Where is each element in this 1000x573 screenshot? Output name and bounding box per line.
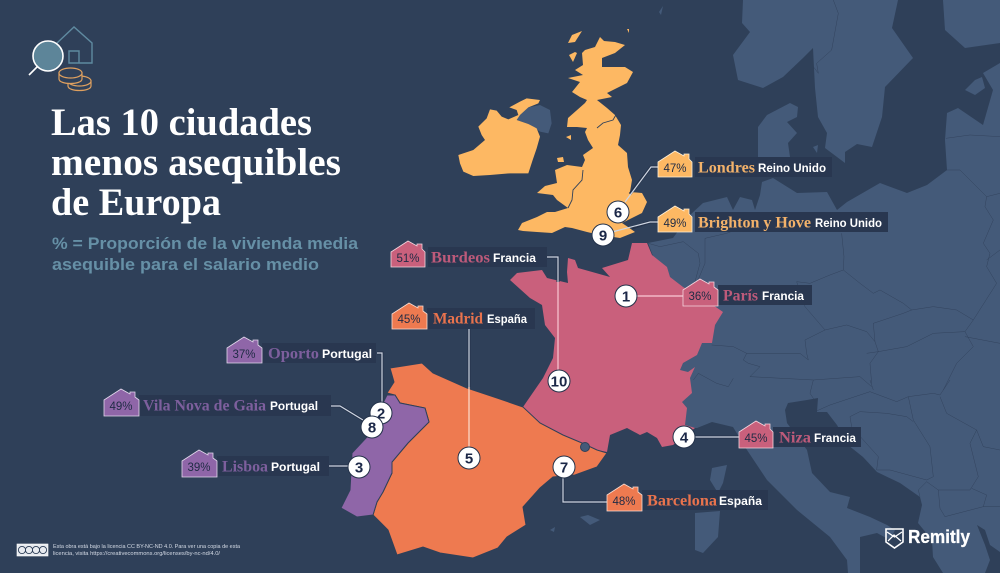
map: Northern Ireland [517, 105, 552, 133]
map: France [510, 243, 723, 452]
title: Las 10 ciudades [51, 101, 312, 144]
marker: 10: 10 [551, 374, 567, 390]
marker: 2: 2 [377, 406, 385, 422]
callout: Barcelona [563, 477, 768, 511]
map: Adriatic and Ionian seas [785, 398, 943, 573]
callout: Lisboa [182, 450, 352, 477]
callout: Oporto: Portugal [322, 349, 372, 361]
marker: 7 [553, 456, 575, 478]
marker: 5: 5 [465, 450, 473, 468]
map: Ireland [458, 98, 540, 176]
callout: Brighton y Hove: Brighton y Hove [698, 214, 811, 232]
marker: 9 [592, 224, 614, 246]
map: Andorra [580, 442, 590, 452]
callout: Lisboa: 39% [187, 462, 211, 474]
callout: París [626, 279, 812, 306]
map: northern borders [813, 0, 1000, 138]
callout: Niza: Niza [779, 430, 811, 446]
marker: 8 [361, 416, 383, 438]
callout: Niza: Francia [814, 433, 857, 445]
callout: Madrid: 45% [397, 314, 421, 326]
title: menos asequibles [51, 141, 341, 184]
marker: 10 [548, 370, 570, 392]
callout: Vila Nova de Gaia: Vila Nova de Gaia [143, 398, 266, 414]
callout: Brighton y Hove [612, 206, 888, 232]
callout: Vila Nova de Gaia: 49% [109, 401, 133, 413]
callout: Niza: 45% [744, 433, 768, 445]
callout: Vila Nova de Gaia [104, 389, 363, 420]
subtitle: asequible para el salario medio [52, 255, 319, 274]
license badge [17, 544, 48, 556]
callout: París: Francia [762, 291, 805, 303]
callout: Niza [695, 421, 861, 448]
map: southern Europe borders [693, 373, 1000, 517]
marker: 4 [673, 426, 695, 448]
map: surrounding Europe land [550, 0, 1000, 573]
callout: Oporto: Oporto [268, 346, 319, 362]
marker: 4: 4 [680, 430, 689, 446]
callout: Burdeos: Burdeos [431, 250, 490, 266]
marker: 3: 3 [355, 460, 363, 476]
callout: Vila Nova de Gaia: Portugal [270, 401, 318, 413]
callout: Londres: 47% [663, 163, 687, 175]
callout: Lisboa: Lisboa [222, 458, 268, 476]
logo: Remitly: Remitly [908, 527, 970, 547]
callout: Madrid: Madrid [433, 310, 483, 328]
logo: Remitly [886, 527, 970, 548]
callout: Londres [625, 151, 832, 202]
callout: Brighton y Hove: 49% [663, 218, 687, 230]
license text: licencia, visita https://creativecommons.org/licenses/by-nc-nd/4.0/ [53, 551, 220, 557]
icon: house, magnifier and coins [29, 27, 92, 90]
callout: París: 36% [688, 291, 712, 303]
callout: Barcelona: Barcelona [647, 492, 717, 510]
title: de Europa [51, 181, 221, 224]
marker: 9: 9 [599, 228, 607, 244]
license text: Esta obra está bajo la licencia CC BY-NC-ND 4.0. Para ver una copia de esta [53, 544, 241, 550]
subtitle: % = Proporción de la vivienda media [52, 234, 359, 253]
callout: Madrid: España [487, 314, 528, 326]
map: United Kingdom [518, 29, 647, 238]
marker: 2 [370, 402, 392, 424]
map: Portugal [341, 395, 429, 517]
callout: Londres: Reino Unido [758, 163, 826, 175]
callout: Londres: Londres [698, 160, 755, 176]
callout: Burdeos: 51% [396, 253, 420, 265]
map: central Europe borders [648, 170, 1000, 390]
marker: 3 [348, 456, 370, 478]
callout: Brighton y Hove: Reino Unido [815, 218, 882, 230]
marker: 1: 1 [622, 288, 630, 306]
callout: Barcelona: España [719, 496, 763, 508]
callout: París: París [723, 288, 758, 304]
marker: 5 [458, 447, 480, 469]
callout: Burdeos: Francia [493, 253, 537, 265]
marker: 8: 8 [368, 420, 376, 436]
marker: 7: 7 [560, 460, 568, 476]
callout: Oporto [227, 337, 382, 405]
marker: 1 [615, 285, 637, 307]
callout: Barcelona: 48% [612, 496, 636, 508]
callout: Madrid [392, 303, 535, 450]
map: Spain [373, 363, 607, 558]
marker: 6 [607, 201, 629, 223]
map: Aegean sea [977, 525, 1000, 573]
callout: Burdeos [391, 241, 558, 372]
callout: Oporto: 37% [232, 349, 256, 361]
callout: Lisboa: Portugal [271, 462, 320, 474]
marker: 6: 6 [614, 204, 622, 222]
